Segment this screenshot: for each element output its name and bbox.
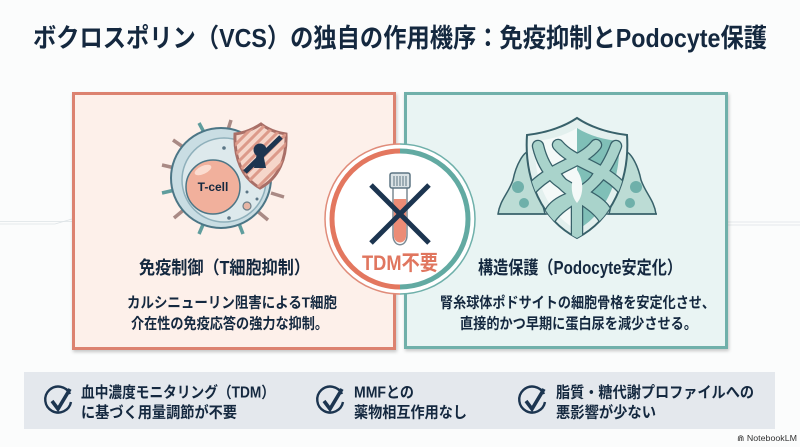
benefit: no TDM dose adjustment: 血中濃度モニタリング（TDM） (81, 382, 275, 402)
benefit: no MMF interaction: MMFとの (354, 384, 414, 402)
icon: podocyte shield (498, 118, 657, 238)
text block: immune control description: カルシニューリン阻害によるT細胞 (127, 294, 337, 312)
benefit: no TDM dose adjustment (45, 382, 275, 422)
text block: structural protection description: 直接的かつ早期に蛋白尿を減少させる。 (460, 314, 697, 332)
watermark: ⋒ NotebookLM (737, 433, 797, 443)
icon: check (317, 387, 343, 413)
panel: structural protection (406, 94, 726, 348)
icon: check (519, 387, 545, 413)
text block: immune control description (127, 294, 337, 332)
label: TDM not required: TDM不要 (362, 252, 438, 275)
benefit: low metabolic impact: 悪影響が少ない (556, 402, 656, 422)
heading: structural protection: 構造保護（Podocyte安定化） (478, 258, 682, 278)
icon: crossed-out test tube (371, 173, 429, 245)
benefit: low metabolic impact (519, 382, 754, 422)
benefit: no MMF interaction: 薬物相互作用なし (354, 404, 467, 422)
icon: T-cell with shield: T-cell (198, 180, 228, 194)
text block: structural protection description: 腎糸球体ポドサイトの細胞骨格を安定化させ、 (440, 294, 715, 312)
benefit: no MMF interaction (317, 384, 467, 422)
text block: immune control description: 介在性の免疫応答の強力な抑制。 (131, 314, 328, 332)
text block: structural protection description (440, 294, 715, 332)
benefit: no TDM dose adjustment: に基づく用量調節が不要 (81, 402, 237, 422)
icon: T-cell with shield (162, 120, 290, 234)
panel: benefits band (24, 372, 775, 429)
benefit: low metabolic impact: 脂質・糖代謝プロファイルへの (556, 382, 754, 402)
panel: immune control (74, 94, 394, 348)
center badge: TDM not required (325, 144, 475, 294)
icon: check (45, 387, 71, 413)
heading: immune control: 免疫制御（T細胞抑制） (139, 257, 310, 278)
